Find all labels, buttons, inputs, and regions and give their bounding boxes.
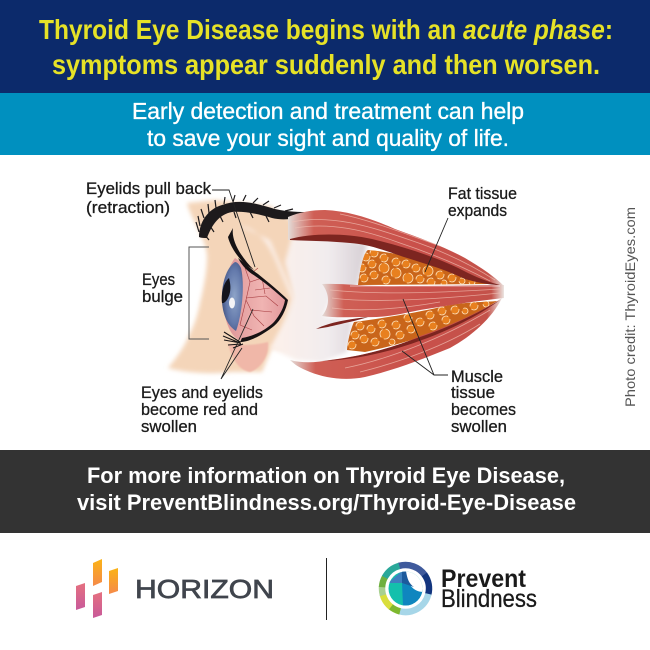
label: eyes and eyelids red and swollen: Eyes and eyelids <box>141 383 263 402</box>
iris <box>222 262 243 331</box>
label: eyes bulge: Eyes <box>142 270 175 289</box>
subheader banner: early detection: to save your sight and quality of life. <box>147 125 509 151</box>
label: eyelids pull back: (retraction) <box>86 198 170 217</box>
eye globe <box>222 258 288 340</box>
logo: Prevent Blindness <box>378 562 536 616</box>
fat tissue: upper <box>358 250 487 285</box>
muscle: lower <box>290 298 502 379</box>
label: muscle tissue becomes swollen: tissue <box>451 383 495 402</box>
label: fat tissue expands: Fat tissue <box>448 184 517 203</box>
call to action banner: visit PreventBlindness.org/Thyroid-Eye-Disease <box>77 490 576 515</box>
header banner: acute phase: symptoms appear suddenly and then worsen. <box>52 49 600 80</box>
label: fat tissue expands: expands <box>448 201 507 220</box>
divider <box>326 558 327 620</box>
label: muscle tissue becomes swollen: becomes <box>451 400 516 419</box>
muscle: middle <box>316 284 504 329</box>
header banner: acute phase: Thyroid Eye Disease begins with an acute phase: <box>39 14 613 45</box>
eyelids and lashes <box>223 228 288 348</box>
label: eyes bulge <box>142 247 209 339</box>
face skin <box>168 200 298 373</box>
label: muscle tissue becomes swollen: swollen <box>451 417 507 436</box>
label: muscle tissue becomes swollen <box>402 299 516 436</box>
header banner: acute phase <box>0 0 650 93</box>
logo: Prevent Blindness: Prevent <box>441 565 527 593</box>
label: eyes bulge: bulge <box>142 287 183 306</box>
label: muscle tissue becomes swollen: Muscle <box>451 367 503 386</box>
subheader banner: early detection <box>0 93 650 155</box>
label: eyes and eyelids red and swollen: swollen <box>141 417 197 436</box>
label: eyelids pull back <box>86 179 255 267</box>
logo: Horizon <box>76 559 274 618</box>
eye anatomy illustration <box>168 195 504 379</box>
call to action banner <box>0 450 650 533</box>
label: eyelids pull back: Eyelids pull back <box>86 179 211 198</box>
photo credit: Photo credit: ThyroidEyes.com <box>622 207 638 407</box>
call to action banner: For more information on Thyroid Eye Disease, <box>87 463 565 488</box>
label: eyes and eyelids red and swollen: become red and <box>141 400 258 419</box>
label: fat tissue expands <box>425 184 517 272</box>
logo: Prevent Blindness: Blindness <box>441 585 537 613</box>
fat tissue: lower <box>345 300 500 354</box>
muscle: upper <box>288 210 504 286</box>
orbit socket <box>270 236 367 362</box>
label: eyes and eyelids red and swollen <box>141 309 263 436</box>
logo: Horizon: HORIZON <box>135 574 274 604</box>
subheader banner: early detection: Early detection and treatment can help <box>132 98 524 124</box>
eyebrow <box>196 195 310 240</box>
